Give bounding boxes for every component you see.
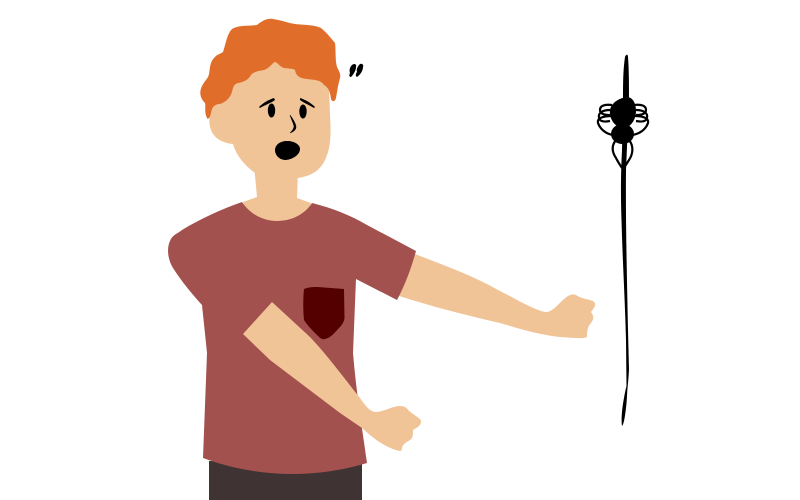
spider legs <box>598 105 648 168</box>
trousers <box>209 461 362 500</box>
left arm <box>243 302 421 451</box>
head <box>200 19 340 178</box>
spider abdomen <box>610 97 636 128</box>
spider thread <box>621 55 629 426</box>
shirt pocket <box>303 287 344 339</box>
left eye <box>268 104 275 118</box>
right arm <box>396 252 595 338</box>
nose <box>290 115 296 133</box>
t-shirt <box>168 202 416 474</box>
face <box>209 55 331 178</box>
exclamation marks <box>349 64 363 77</box>
right eye <box>299 104 307 118</box>
spider on thread <box>598 55 648 426</box>
mouth <box>275 141 300 160</box>
right eyebrow <box>300 98 315 108</box>
left eyebrow <box>259 98 275 108</box>
spider head <box>611 124 634 144</box>
hair <box>200 19 340 119</box>
neck <box>243 165 311 225</box>
